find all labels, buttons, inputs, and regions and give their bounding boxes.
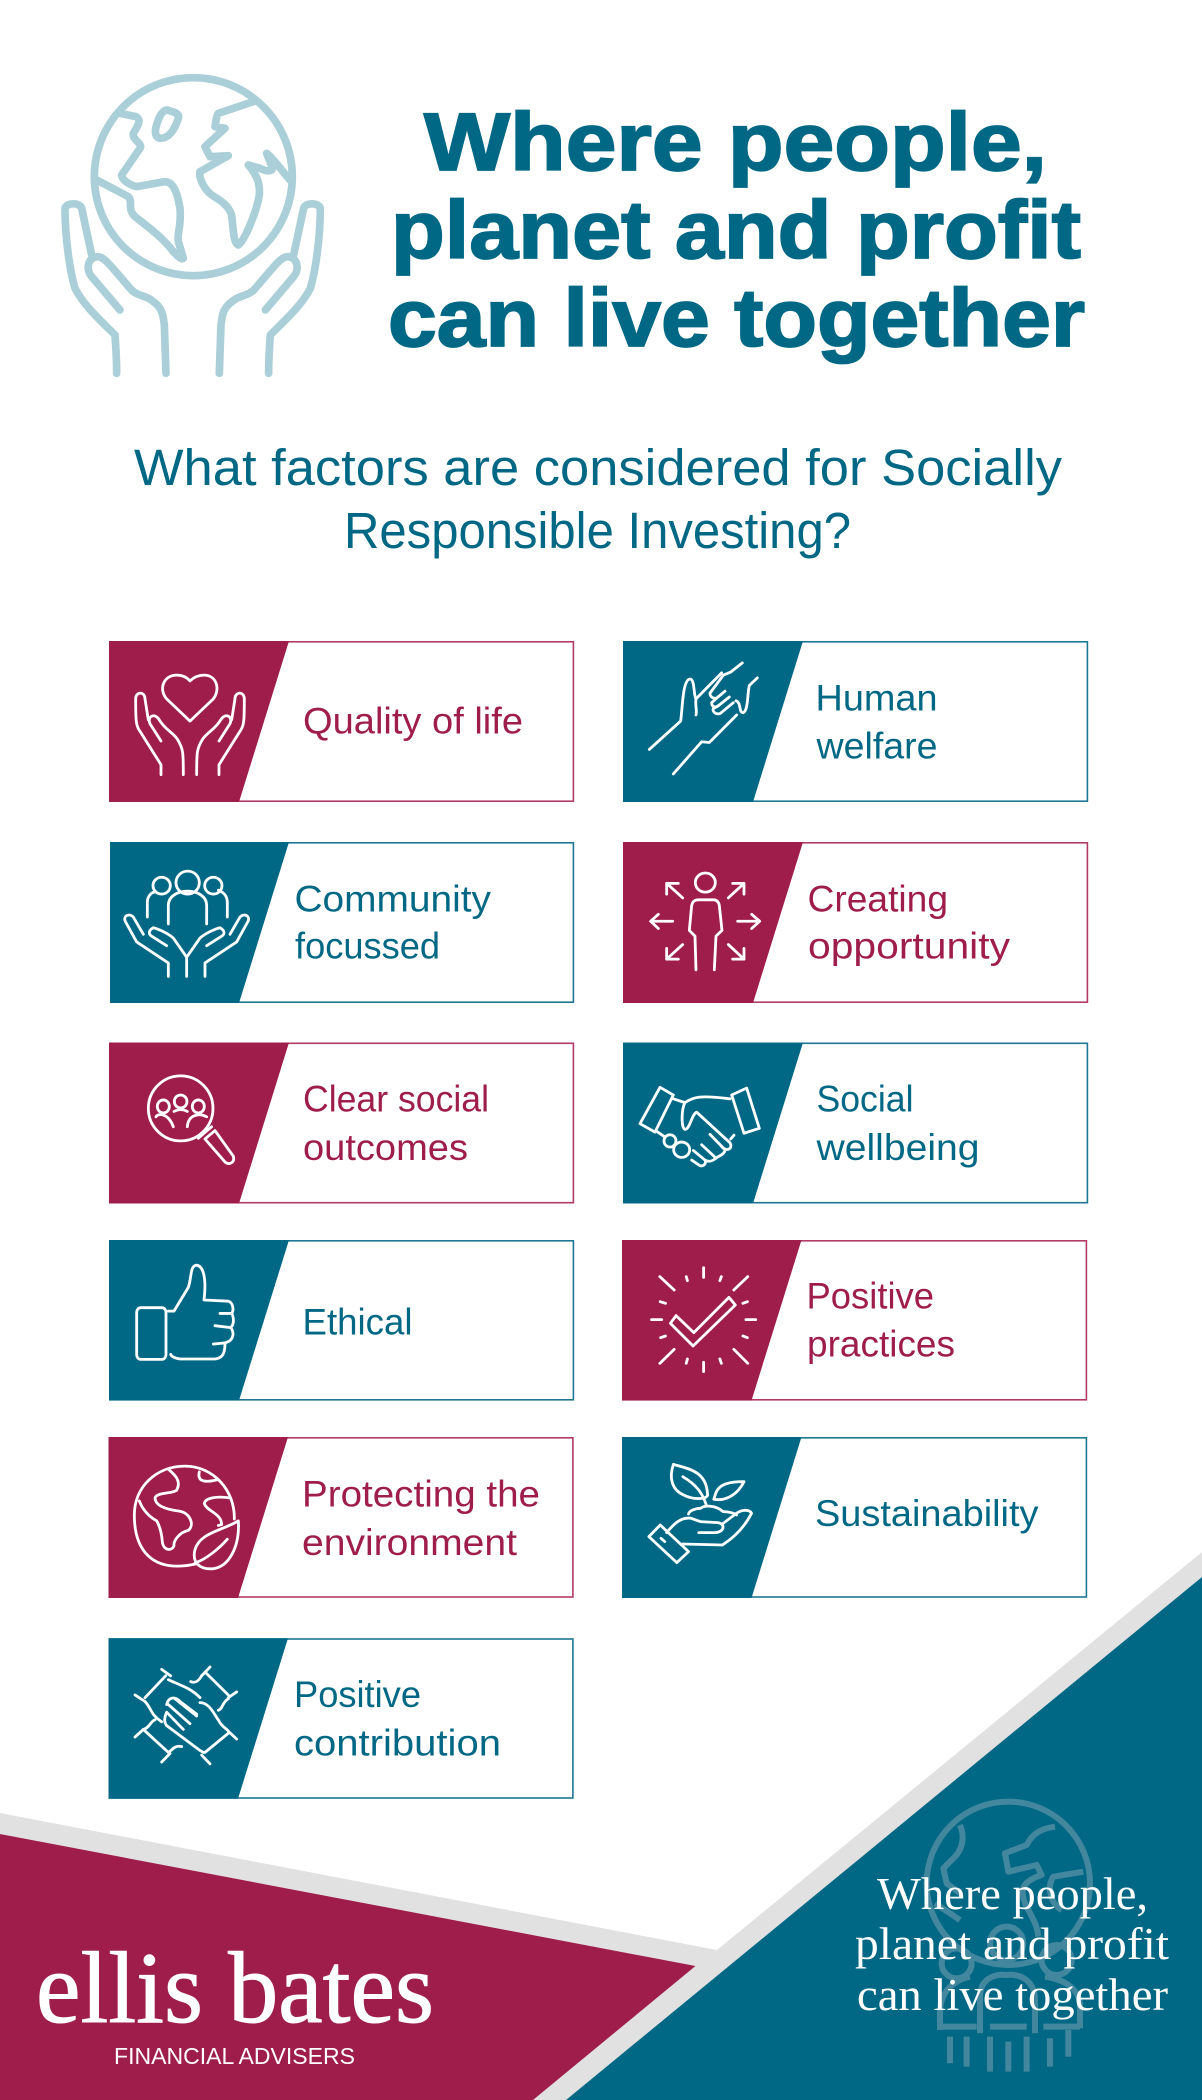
icon: people in hands xyxy=(125,871,249,976)
logo wordmark: ellis bates xyxy=(36,1932,434,2045)
icon: magnifier over people xyxy=(148,1076,234,1163)
label: Protecting the xyxy=(302,1474,540,1514)
footer slogan xyxy=(855,1869,1170,2020)
panel: Sustainability xyxy=(622,1437,1086,1598)
footer grey band xyxy=(0,1552,1202,2100)
icon: faded globe and people xyxy=(927,1802,1090,2072)
icon: hand with seedling xyxy=(649,1464,752,1563)
label line 2: contribution xyxy=(294,1722,501,1764)
icon: hands with heart xyxy=(136,675,244,775)
footer slogan: planet and profit xyxy=(855,1919,1170,1969)
panel: Social wellbeing xyxy=(623,1042,1087,1204)
logo strapline: FINANCIAL ADVISERS xyxy=(114,2043,355,2069)
label line 2: opportunity xyxy=(808,926,1011,966)
label: Creating xyxy=(808,878,948,920)
label line 2: environment xyxy=(302,1522,518,1563)
label: Quality of life xyxy=(303,700,523,742)
footer slogan: Where people, xyxy=(877,1869,1148,1919)
subtitle: What factors are considered for Socially xyxy=(134,439,1063,496)
icon: handshake xyxy=(640,1087,759,1166)
label: Positive xyxy=(806,1276,934,1316)
footer maroon panel xyxy=(0,1834,696,2100)
panel: Human welfare xyxy=(623,641,1087,802)
icon: helping hands xyxy=(649,663,757,774)
label: Human xyxy=(816,678,938,718)
subtitle: Responsible Investing? xyxy=(344,502,851,559)
label: Positive xyxy=(294,1674,421,1715)
panel: Positive contribution xyxy=(108,1638,573,1799)
title xyxy=(388,97,1085,364)
panel: Quality of life xyxy=(109,641,573,802)
panel: Creating opportunity xyxy=(623,842,1087,1003)
icon: joined hands xyxy=(135,1667,237,1764)
icon: person with arrows xyxy=(651,873,760,970)
title: planet and profit xyxy=(391,185,1081,276)
subtitle xyxy=(134,439,1063,559)
label line 2: focussed xyxy=(295,926,440,966)
label: Clear social xyxy=(303,1078,489,1120)
label line 2: outcomes xyxy=(303,1127,468,1168)
panel: Clear social outcomes xyxy=(109,1042,573,1204)
panel: Ethical xyxy=(109,1240,573,1400)
panel: Protecting the environment xyxy=(108,1437,573,1598)
icon: tick with rays xyxy=(652,1268,756,1372)
label: Community xyxy=(294,878,492,920)
icon: globe with leaf xyxy=(134,1466,238,1569)
footer teal panel xyxy=(566,1577,1202,2100)
label line 2: wellbeing xyxy=(815,1127,980,1168)
title: can live together xyxy=(388,273,1085,364)
icon: hands holding globe xyxy=(65,78,320,373)
panel: Positive practices xyxy=(622,1240,1086,1400)
footer slogan: can live together xyxy=(857,1970,1168,2020)
icon: thumbs up xyxy=(137,1265,233,1359)
label line 2: welfare xyxy=(815,726,938,766)
label: Sustainability xyxy=(815,1493,1039,1534)
label: Ethical xyxy=(302,1302,412,1342)
label line 2: practices xyxy=(807,1324,955,1364)
label: Social xyxy=(816,1078,914,1120)
panel: Community focussed xyxy=(110,842,573,1003)
title: Where people, xyxy=(424,97,1047,188)
